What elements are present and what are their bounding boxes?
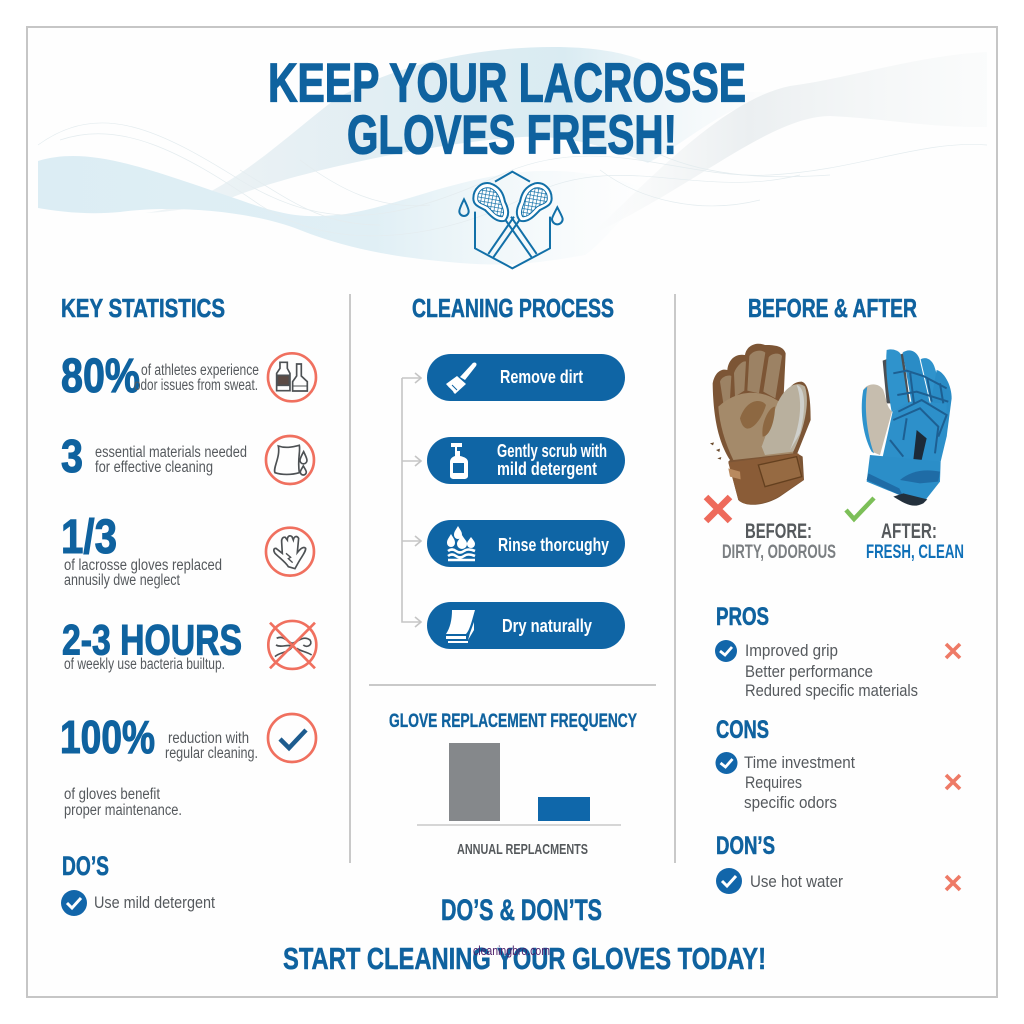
pros list: PROS [716,603,769,631]
don'ts list [716,832,960,894]
don'ts list: DON’S [716,832,775,860]
stat: 100%: of gloves benefit [64,786,161,803]
step 2: gently scrub [427,437,625,484]
label: after: FRESH, CLEAN [866,542,964,563]
step 2: gently scrub: mild detergent [497,459,597,479]
icon: damaged glove [266,528,314,576]
heading: key statistics: KEY STATISTICS [61,293,225,323]
icon: check in circle [268,714,316,762]
do's list: DO’S [62,851,109,881]
step 1: remove dirt [427,354,625,401]
don'ts list: Use hot water [750,872,843,891]
stat: 100%: 100% [60,711,155,763]
stat: 1/3: annusily dwe neglect [64,572,181,589]
stat: 100%: proper maintenance. [64,802,182,819]
stat: 2-3 hours [62,616,242,673]
logo: crossed lacrosse sticks in hexagon [459,172,563,268]
stat: 100% [60,711,258,819]
heading: before and after: BEFORE & AFTER [748,293,917,323]
cons list [716,716,960,812]
step 3: rinse: Rinse thorcughy [498,535,609,555]
label: after: AFTER: [881,520,937,543]
do's list [61,851,215,916]
chart: glove replacement frequency: GLOVE REPLACEMENT FREQUENCY [389,711,637,732]
watermark: cleaningbro.com [473,944,550,958]
stat: 3: essential materials needed [95,444,247,461]
chart: glove replacement frequency: ANNUAL REPLACMENTS [457,841,588,858]
label: before: DIRTY, ODOROUS [722,542,836,563]
pros list: Improved grip [745,641,838,660]
cons list: Time investment [744,753,855,772]
stat: 80% [61,350,259,403]
column dividers [350,294,675,863]
title [268,52,746,166]
cons list: Requires [745,773,802,792]
stat: 3: 3 [61,430,83,482]
heading: cleaning process: CLEANING PROCESS [412,293,614,323]
icon: red cross [706,497,730,521]
background waves [38,47,987,264]
stat: 80%: 80% [61,350,140,403]
stat: 2-3 hours: 2-3 HOURS [62,616,242,664]
flow connector arrows [402,373,421,627]
icon: crossed out bacteria [268,621,316,669]
step 4: dry: Dry naturally [502,616,592,636]
stat: 80%: odor issues from sweat. [134,377,258,394]
panel: cleaning process [389,293,637,858]
icon: green check [846,498,874,519]
stat: 3 [61,430,247,482]
step 3: rinse [427,520,625,567]
icon: bottle and brush [268,353,316,401]
stat: 100%: reduction with [168,730,249,747]
stat: 1/3: 1/3 [61,511,117,564]
stat: 2-3 hours: of weekly use bacteria builtup. [64,656,225,673]
stat: 1/3 [61,511,222,589]
label: before [722,520,836,563]
footer: call to action: START CLEANING YOUR GLOVES TODAY! [283,941,766,976]
footer: do's and don'ts heading: DO’S & DON’TS [441,894,602,927]
dirty glove illustration [710,344,811,505]
step 2: gently scrub: Gently scrub with [497,441,607,461]
title: GLOVES FRESH! [347,104,677,166]
step 4: dry [427,602,625,649]
stat: 1/3: of lacrosse gloves replaced [64,557,222,574]
clean glove illustration [862,349,952,506]
cons list: specific odors [744,793,837,812]
stat: 100%: regular cleaning. [165,745,258,762]
panel: before and after [706,293,964,894]
step 1: remove dirt: Remove dirt [500,367,583,387]
icon: sponge and drop [266,436,314,484]
pros list: Better performance [745,662,873,681]
stat: 3: for effective cleaning [95,459,213,476]
label: after [866,520,964,563]
pros list [715,603,960,700]
cons list: CONS [716,716,769,744]
do's list: Use mild detergent [94,893,215,912]
panel: key statistics [60,293,316,916]
title: KEEP YOUR LACROSSE [268,52,746,114]
label: before: BEFORE: [745,520,812,543]
pros list: Redured specific materials [745,681,918,700]
stat: 80%: of athletes experience [141,362,259,379]
chart: glove replacement frequency [389,711,637,858]
